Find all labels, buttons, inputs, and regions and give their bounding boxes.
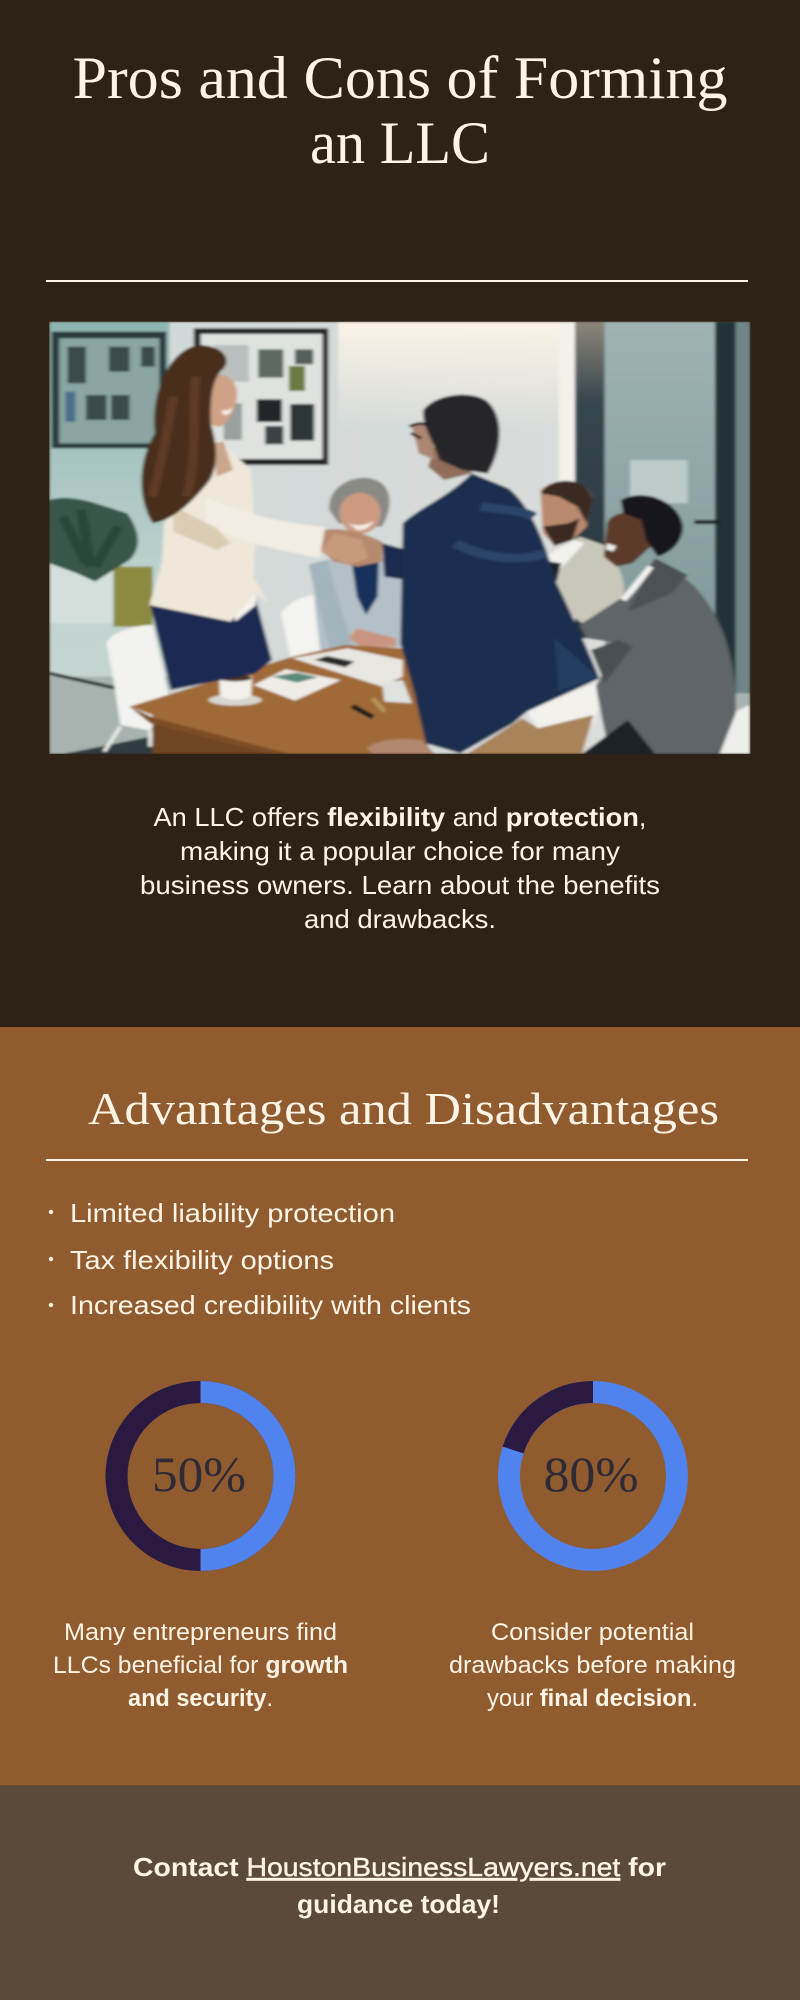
intro paragraph: making it a popular choice for many — [180, 836, 620, 866]
intro paragraph: business owners. Learn about the benefits — [140, 870, 660, 900]
intro paragraph: An LLC offers flexibility and protection, — [154, 802, 646, 832]
intro paragraph — [140, 802, 660, 934]
contact text: guidance today! — [297, 1889, 500, 1919]
man in grey suit — [580, 558, 736, 754]
caption: 50%: and security. — [128, 1685, 273, 1712]
caption: 50%: Many entrepreneurs find — [64, 1619, 337, 1646]
intro paragraph: and drawbacks. — [304, 904, 496, 934]
contact text: Contact HoustonBusinessLawyers.net for — [133, 1852, 666, 1882]
caption: 80%: Consider potential — [491, 1619, 694, 1646]
chart: 50% donut: 50% — [152, 1446, 246, 1502]
panel: contact footer — [0, 1785, 800, 2000]
photo: business handshake at a meeting table — [49, 322, 750, 754]
panel: intro background — [0, 0, 800, 1027]
older woman — [311, 555, 407, 650]
bullet list — [49, 1198, 471, 1320]
caption: 50% — [53, 1619, 348, 1712]
contact text — [133, 1852, 666, 1919]
section heading: Advantages and Disadvantages — [88, 1083, 719, 1134]
title: Pros and Cons of Forming — [72, 45, 728, 111]
caption: 80% — [449, 1619, 736, 1712]
chair — [107, 625, 169, 731]
panel: advantages and disadvantages — [0, 1027, 800, 1785]
caption: 80%: your final decision. — [487, 1685, 698, 1712]
standing woman — [149, 600, 274, 691]
chart: 80% donut — [509, 1392, 677, 1560]
table — [130, 645, 430, 754]
title: an LLC — [310, 110, 490, 176]
caption: 80%: drawbacks before making — [449, 1652, 736, 1679]
man with beard — [550, 537, 624, 623]
title — [72, 45, 728, 176]
standing person in navy blazer — [527, 683, 599, 730]
chart: 80% donut: 80% — [544, 1446, 638, 1502]
bullet list: Increased credibility with clients — [70, 1290, 471, 1320]
bullet list: Limited liability protection — [70, 1198, 395, 1228]
caption: 50%: LLCs beneficial for growth — [53, 1652, 348, 1679]
chart: 50% donut — [116, 1392, 284, 1560]
bullet list: Tax flexibility options — [70, 1245, 334, 1275]
